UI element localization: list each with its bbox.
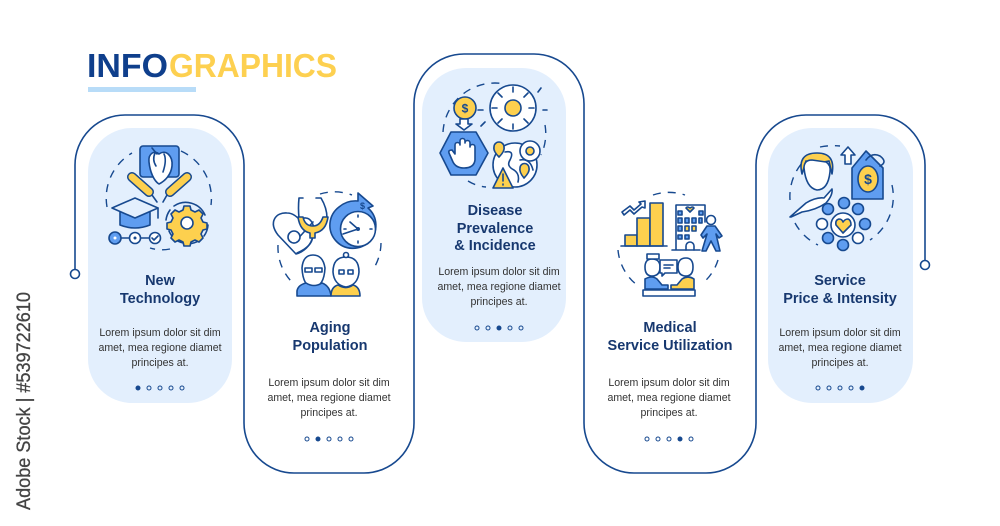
body text: principes at.	[640, 407, 698, 419]
heading: Technology	[120, 291, 200, 307]
panel: medical service utilization	[607, 192, 732, 441]
body text: principes at.	[131, 357, 189, 369]
body text: Lorem ipsum dolor sit dim	[438, 266, 560, 278]
title: INFO	[87, 47, 168, 84]
heading: Disease	[468, 203, 522, 219]
serpentine outline connector	[70, 54, 930, 473]
heading: Service Utilization	[608, 338, 732, 354]
icon: disease: $	[462, 102, 469, 116]
pagination dots	[645, 437, 693, 441]
icon: aging: $	[360, 201, 365, 211]
body text: principes at.	[300, 407, 358, 419]
title: GRAPHICS	[169, 47, 337, 84]
heading: New	[145, 273, 176, 289]
icon: aging	[273, 192, 381, 296]
panel: new technology	[98, 146, 222, 390]
panel: service price	[778, 146, 902, 390]
heading: Price & Intensity	[783, 291, 897, 307]
panel: aging population	[267, 192, 391, 441]
icon: disease	[440, 83, 547, 188]
pagination dots	[816, 386, 864, 390]
body text: amet, mea regione diamet	[778, 342, 902, 354]
body text: amet, mea regione diamet	[267, 392, 391, 404]
icon: service price	[790, 146, 893, 250]
stock credit: Adobe Stock | #539722610	[14, 292, 35, 510]
heading: Aging	[309, 320, 351, 336]
icon: medical	[618, 192, 722, 296]
heading: Medical	[643, 320, 697, 336]
body text: amet, mea regione diamet	[607, 392, 731, 404]
heading: Population	[293, 338, 367, 354]
panel: blue card backgrounds	[88, 68, 913, 403]
pagination dots	[305, 437, 353, 441]
body text: amet, mea regione diamet	[98, 342, 222, 354]
heading: Service	[814, 273, 866, 289]
pagination dots	[475, 326, 523, 330]
body text: Lorem ipsum dolor sit dim	[268, 377, 390, 389]
body text: Lorem ipsum dolor sit dim	[99, 327, 221, 339]
body text: amet, mea regione diamet	[437, 281, 561, 293]
body text: Lorem ipsum dolor sit dim	[779, 327, 901, 339]
heading: Prevalence	[457, 221, 533, 237]
body text: Lorem ipsum dolor sit dim	[608, 377, 730, 389]
body text: principes at.	[470, 296, 528, 308]
pagination dots	[136, 386, 184, 390]
panel: disease prevalence	[437, 83, 561, 330]
body text: principes at.	[811, 357, 869, 369]
heading: & Incidence	[454, 238, 536, 254]
icon: technology	[106, 146, 211, 250]
icon: service price: $	[864, 171, 872, 187]
title	[87, 47, 337, 92]
